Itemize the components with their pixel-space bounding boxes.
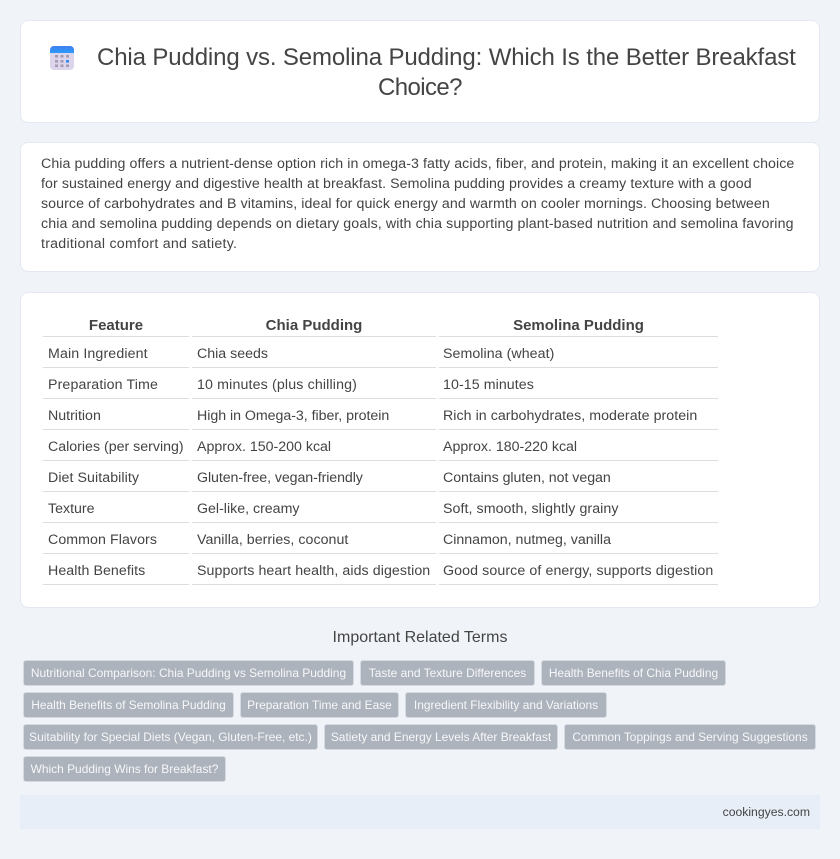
intro text: Chia pudding offers a nutrient-dense option rich in omega-3 fatty acids, fiber, and protein, making it an excellent choice: [41, 156, 794, 172]
panel: title card: [20, 20, 820, 123]
comparison table: [43, 317, 718, 585]
comparison table: Approx. 150-200 kcal: [197, 439, 331, 455]
comparison table: Supports heart health, aids digestion: [197, 563, 430, 579]
title: Choice?: [378, 74, 462, 101]
title: Chia Pudding vs. Semolina Pudding: Which Is the Better Breakfast: [97, 44, 796, 71]
icon: calendar: [50, 46, 74, 70]
comparison table: Calories (per serving): [48, 439, 184, 455]
tags: related terms: Health Benefits of Chia Pudding: [549, 666, 718, 680]
comparison table: Rich in carbohydrates, moderate protein: [443, 408, 697, 424]
comparison table: Preparation Time: [48, 377, 158, 393]
tags: related terms: Common Toppings and Serving Suggestions: [572, 730, 808, 744]
panel: intro paragraph: [20, 142, 820, 272]
comparison table: 10 minutes (plus chilling): [197, 377, 357, 393]
tags: related terms: Health Benefits of Semolina Pudding: [31, 698, 226, 712]
tags: related terms: Satiety and Energy Levels After Breakfast: [331, 730, 551, 744]
comparison table: Common Flavors: [48, 532, 157, 548]
footer bar: [20, 795, 820, 829]
comparison table: Chia Pudding: [266, 317, 362, 334]
intro text: source of carbohydrates and B vitamins, ideal for quick energy and warmth on cooler mornings. Choosing between: [41, 196, 770, 212]
comparison table: Approx. 180-220 kcal: [443, 439, 577, 455]
comparison table: Feature: [89, 317, 143, 334]
tags: related terms: Which Pudding Wins for Breakfast?: [31, 762, 218, 776]
tags: related terms: Ingredient Flexibility and Variations: [414, 698, 598, 712]
intro text: traditional comfort and satiety.: [41, 236, 237, 252]
tags: related terms: Preparation Time and Ease: [247, 698, 392, 712]
intro text: chia and semolina pudding depends on dietary goals, with chia supporting plant-based nutrition and semolina favoring: [41, 216, 794, 232]
comparison table: Chia seeds: [197, 346, 268, 362]
comparison table: Cinnamon, nutmeg, vanilla: [443, 532, 611, 548]
tags: related terms: [23, 660, 816, 782]
comparison table: High in Omega-3, fiber, protein: [197, 408, 389, 424]
tags: related terms: Taste and Texture Differences: [369, 666, 526, 680]
comparison table: Vanilla, berries, coconut: [197, 532, 348, 548]
panel: comparison table: [20, 292, 820, 608]
tags: related terms: Nutritional Comparison: Chia Pudding vs Semolina Pudding: [31, 666, 346, 680]
comparison table: Texture: [48, 501, 95, 517]
title: [97, 44, 796, 101]
comparison table: Main Ingredient: [48, 346, 148, 362]
comparison table: Contains gluten, not vegan: [443, 470, 611, 486]
comparison table: Health Benefits: [48, 563, 145, 579]
comparison table: Gluten-free, vegan-friendly: [197, 470, 363, 486]
comparison table: Good source of energy, supports digestion: [443, 563, 713, 579]
comparison table: Soft, smooth, slightly grainy: [443, 501, 619, 517]
comparison table: Diet Suitability: [48, 470, 139, 486]
comparison table: Semolina (wheat): [443, 346, 554, 362]
comparison table: Semolina Pudding: [513, 317, 644, 334]
intro text: [41, 156, 794, 252]
footer credit: cookingyes.com: [723, 805, 810, 819]
tags: related terms: Suitability for Special Diets (Vegan, Gluten-Free, etc.): [29, 730, 312, 744]
comparison table: Gel-like, creamy: [197, 501, 300, 517]
intro text: for sustained energy and digestive health at breakfast. Semolina pudding provides a creamy texture with a good: [41, 176, 752, 192]
comparison table: 10-15 minutes: [443, 377, 534, 393]
comparison table: Nutrition: [48, 408, 101, 424]
heading: related terms: Important Related Terms: [333, 629, 507, 646]
